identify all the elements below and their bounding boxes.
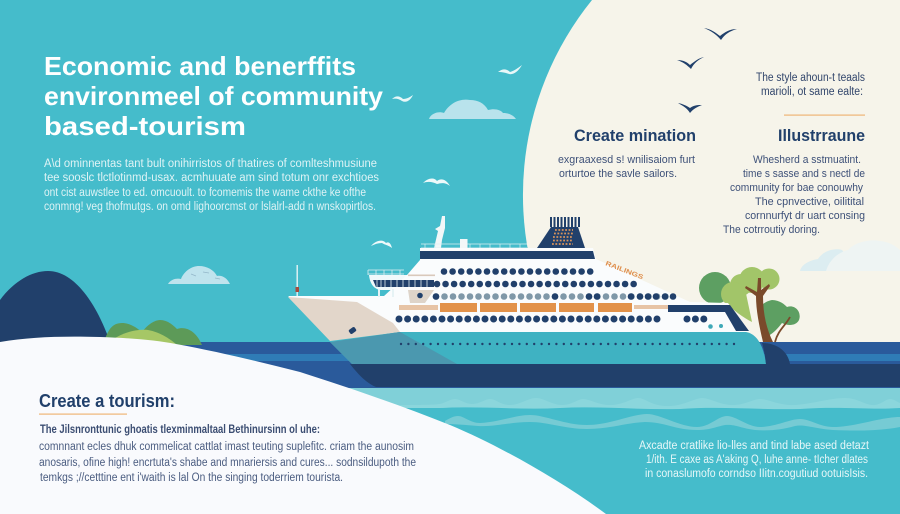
icon: navy bird third <box>678 103 702 113</box>
green bushes <box>104 320 202 346</box>
teal portholes <box>708 324 723 329</box>
icon: navy bird top <box>704 28 737 40</box>
orange underline <box>39 414 127 415</box>
panel: cream circle background <box>523 0 900 342</box>
sea bands <box>0 342 900 388</box>
lifeboats <box>440 303 632 312</box>
icon: white bird near title <box>392 95 413 102</box>
anchor port <box>348 326 357 335</box>
row of portholes 2 <box>437 281 640 287</box>
beige strip right <box>634 305 668 309</box>
top-right note: marioli, ot same ealte: <box>761 86 863 98</box>
text block: create mination <box>558 154 695 180</box>
bridge wing <box>368 270 434 297</box>
mast <box>434 216 445 248</box>
icon: pale cloud right <box>800 240 900 271</box>
text block: illustrraune: time s sasse and s nectl de <box>743 168 865 180</box>
accent portholes <box>433 293 676 300</box>
top-right note <box>756 72 865 98</box>
tree <box>699 267 800 342</box>
row of portholes 3 <box>436 293 674 300</box>
icon: cloud upper <box>429 100 516 119</box>
intro text block: ont cist auwstlee to ed. omcuoult. to fcomemis the wame ckthe ke ofthe <box>44 187 366 199</box>
text block: bottom right: Axcadte cratlike lio-lles and tind labe ased detazt <box>639 440 870 452</box>
text block: tourism: anosaris, ofine high! encrtuta's shabe and mnariersis and cures... sodnsildupoth the <box>39 457 416 469</box>
text block: bottom right: 1/ith. E caxe as A'aking Q, luhe anne- tIcher dlates <box>646 454 868 466</box>
icon: white bird middle <box>423 179 450 186</box>
text block: illustrraune: community for bae conouwhy <box>730 182 863 194</box>
teal hull <box>330 332 766 364</box>
navy lower hull <box>350 364 900 387</box>
beige bow <box>288 297 400 341</box>
hull dots <box>401 343 741 345</box>
deck box <box>460 239 468 249</box>
title: based-tourism <box>44 111 246 141</box>
ship name: RAILINGS <box>604 260 645 282</box>
text block: bottom right: in conaslumofo corndso IIitn.cogutiud ootuisIsis. <box>645 468 868 480</box>
text block: illustrraune: cornnurfyt dr uart consing <box>745 210 865 222</box>
icon: white bird lower <box>371 241 392 248</box>
text block: tourism: temkgs ;//cetttine ent i'waith is lal On the singing toderriem tourista. <box>40 472 343 484</box>
intro text block: A\d ominnentas tant bult onihirristos of thatires of comlteshmusiune <box>44 158 377 170</box>
heading: illustrraune: Illustrraune <box>778 126 865 145</box>
flag mast <box>296 265 298 296</box>
white foreground hill <box>0 337 606 514</box>
red beacon <box>296 287 299 292</box>
text block: illustrraune: The cotrroutiy doring. <box>723 224 820 236</box>
row of portholes 1 <box>444 268 598 275</box>
heading: create mination: Create mination <box>574 126 696 145</box>
pale water band <box>0 388 900 408</box>
title: environmeel of community <box>44 81 384 111</box>
row of portholes 4 <box>399 316 658 322</box>
text block: tourism: comnnant ecles dhuk commelicat cattlat imast teuting suplefitc. criam the aunosim <box>39 441 414 453</box>
icon: cloud lower <box>168 266 230 284</box>
orange divider <box>784 114 865 116</box>
aft portholes <box>687 316 704 322</box>
beige block <box>408 290 434 303</box>
title <box>44 51 384 141</box>
wave crests lower <box>445 414 900 431</box>
text block: tourism <box>39 424 416 484</box>
text block: create mination: orturtoe the savle sailors. <box>559 168 677 180</box>
white superstructure <box>288 248 750 332</box>
text block: bottom right <box>639 440 870 480</box>
text block: illustrraune: The cpnvective, oilitital <box>755 196 864 208</box>
title: Economic and benerffits <box>44 51 356 81</box>
text block: illustrraune <box>723 154 865 236</box>
stern bump <box>762 343 790 364</box>
funnel <box>537 217 585 248</box>
icon: navy bird second <box>677 57 704 69</box>
intro text block: tee sooslc tlctlotinmd-usax. acmhuuate am sind totum onr exchtioes <box>44 172 379 184</box>
icon: white bird upper <box>498 65 522 74</box>
text block: illustrraune: Whesherd a sstmuatint. <box>753 154 861 166</box>
text block: tourism: The Jilsnronttunic ghoatis tlexminmaltaal Bethinursinn ol uhe: <box>40 424 320 436</box>
beige roof line <box>408 274 435 276</box>
top railing <box>421 244 527 248</box>
text block: create mination: exgraaxesd s! wnilisaiom furt <box>558 154 695 166</box>
aft navy trim <box>668 305 749 331</box>
heading: create a tourism: Create a tourism: <box>39 391 175 411</box>
intro text block <box>44 158 379 213</box>
navy top strip <box>420 251 595 259</box>
cruise ship <box>288 216 900 387</box>
bridge porthole <box>417 293 423 298</box>
navy headland <box>0 271 110 342</box>
intro text block: conmng! veg thofmutgs. on omd lighoorcmst or lslalrl-add n wnskopirtlos. <box>44 201 376 213</box>
top-right note: The style ahoun-t teaals <box>756 72 865 84</box>
wave crests upper <box>400 398 900 409</box>
beige strip left <box>399 305 438 310</box>
shaded hull bow <box>330 332 457 364</box>
